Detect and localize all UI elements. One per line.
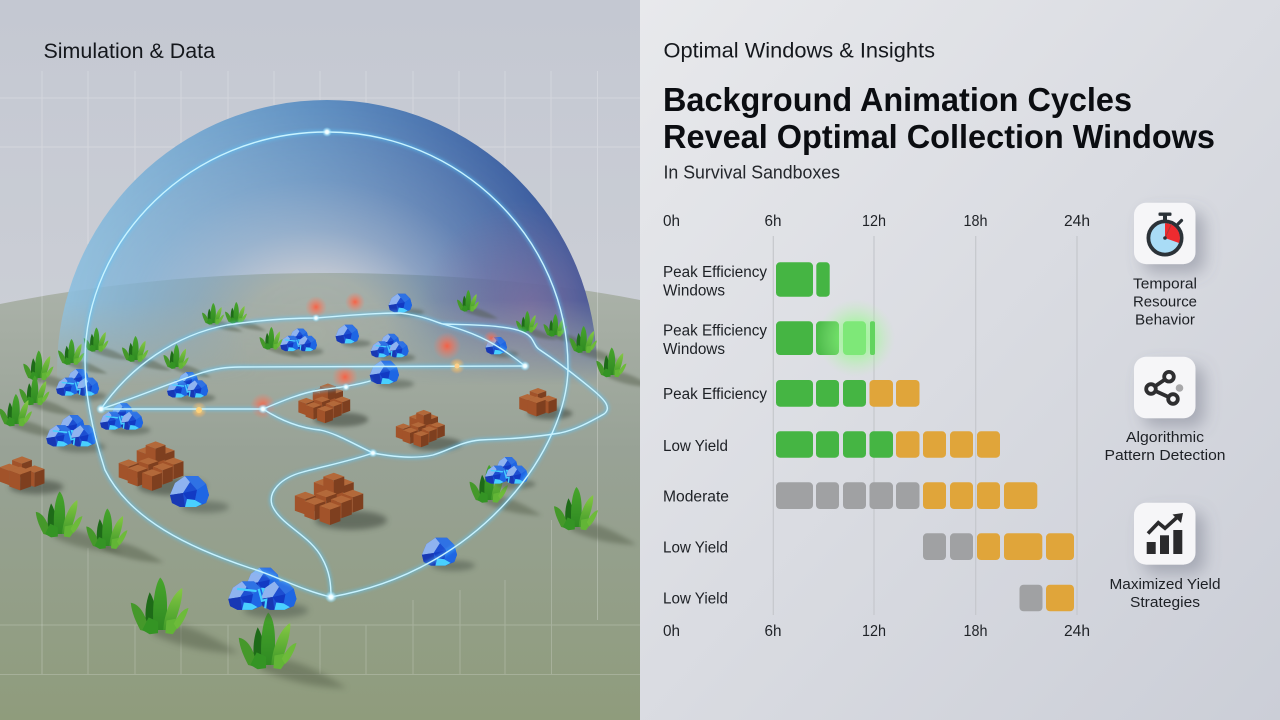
panel: simulation and data bbox=[0, 0, 653, 720]
heading: simulation and data: Simulation & Data bbox=[44, 40, 215, 63]
label: Behavior bbox=[1135, 312, 1195, 329]
sky background bbox=[0, 0, 640, 720]
top time axis: 6h bbox=[764, 213, 782, 230]
row 1 bars bbox=[776, 262, 830, 297]
icon card: rising bar chart bbox=[1134, 503, 1196, 565]
main title: Background Animation Cycles bbox=[663, 81, 1132, 118]
icon card: stopwatch bbox=[1134, 203, 1196, 264]
right panel background bbox=[640, 0, 1280, 720]
label: Resource bbox=[1133, 294, 1197, 311]
label: Maximized Yield bbox=[1110, 576, 1220, 593]
label: Algorithmic bbox=[1126, 429, 1205, 446]
row labels bbox=[663, 264, 767, 608]
row 5 bars bbox=[776, 482, 1037, 509]
network nodes bbox=[96, 127, 530, 603]
row labels: Peak Efficiency bbox=[663, 322, 767, 340]
row labels: Windows bbox=[663, 282, 725, 300]
glass dome bbox=[57, 100, 597, 378]
row labels: Peak Efficiency bbox=[663, 264, 767, 281]
panel: optimal windows and insights bbox=[640, 0, 1280, 720]
insight: maximized yield strategies bbox=[1110, 503, 1220, 611]
label: Strategies bbox=[1130, 594, 1200, 611]
top time axis: 12h bbox=[862, 213, 886, 230]
top time axis: 24h bbox=[1064, 213, 1090, 230]
main title bbox=[663, 81, 1215, 155]
row 7 bars bbox=[1020, 585, 1074, 611]
bottom time axis bbox=[663, 623, 1090, 640]
glow markers: red and orange hot spots bbox=[191, 292, 499, 419]
row labels: Low Yield bbox=[663, 540, 728, 556]
blue crystal ore deposits bbox=[46, 294, 536, 618]
bottom time axis: 6h bbox=[764, 623, 782, 640]
row 2 bars with glow bbox=[776, 299, 895, 377]
row labels: Windows bbox=[663, 341, 725, 358]
row labels: Low Yield bbox=[663, 438, 728, 455]
row labels: Peak Efficiency bbox=[663, 386, 767, 403]
label bbox=[1110, 576, 1220, 611]
icon card: connected nodes bbox=[1134, 357, 1196, 418]
top time axis: 0h bbox=[663, 213, 680, 230]
network paths: glowing simulation routes bbox=[85, 132, 607, 597]
chart: collection windows timeline bbox=[663, 213, 1090, 640]
label bbox=[1133, 276, 1197, 329]
label: Pattern Detection bbox=[1104, 447, 1226, 464]
bottom time axis: 18h bbox=[964, 623, 988, 640]
brick resource piles bbox=[0, 384, 572, 530]
subtitle: In Survival Sandboxes bbox=[664, 163, 840, 183]
row labels: Moderate bbox=[663, 488, 729, 506]
grass tufts bbox=[0, 290, 653, 688]
main title: Reveal Optimal Collection Windows bbox=[663, 118, 1215, 155]
bottom time axis: 12h bbox=[862, 623, 886, 640]
label: Temporal bbox=[1133, 276, 1197, 292]
row 4 bars bbox=[776, 431, 1000, 458]
section label: Optimal Windows & Insights bbox=[664, 40, 935, 63]
top time axis: 18h bbox=[964, 213, 988, 230]
insight: temporal resource behavior bbox=[1133, 203, 1197, 329]
insight: algorithmic pattern detection bbox=[1104, 357, 1226, 464]
row labels: Low Yield bbox=[663, 590, 728, 608]
top time axis bbox=[663, 213, 1090, 230]
bottom time axis: 0h bbox=[663, 623, 680, 640]
row 3 bars bbox=[776, 380, 920, 407]
ground plane bbox=[0, 273, 640, 720]
bottom time axis: 24h bbox=[1064, 623, 1090, 640]
row 6 bars bbox=[923, 533, 1074, 560]
label bbox=[1104, 429, 1226, 464]
